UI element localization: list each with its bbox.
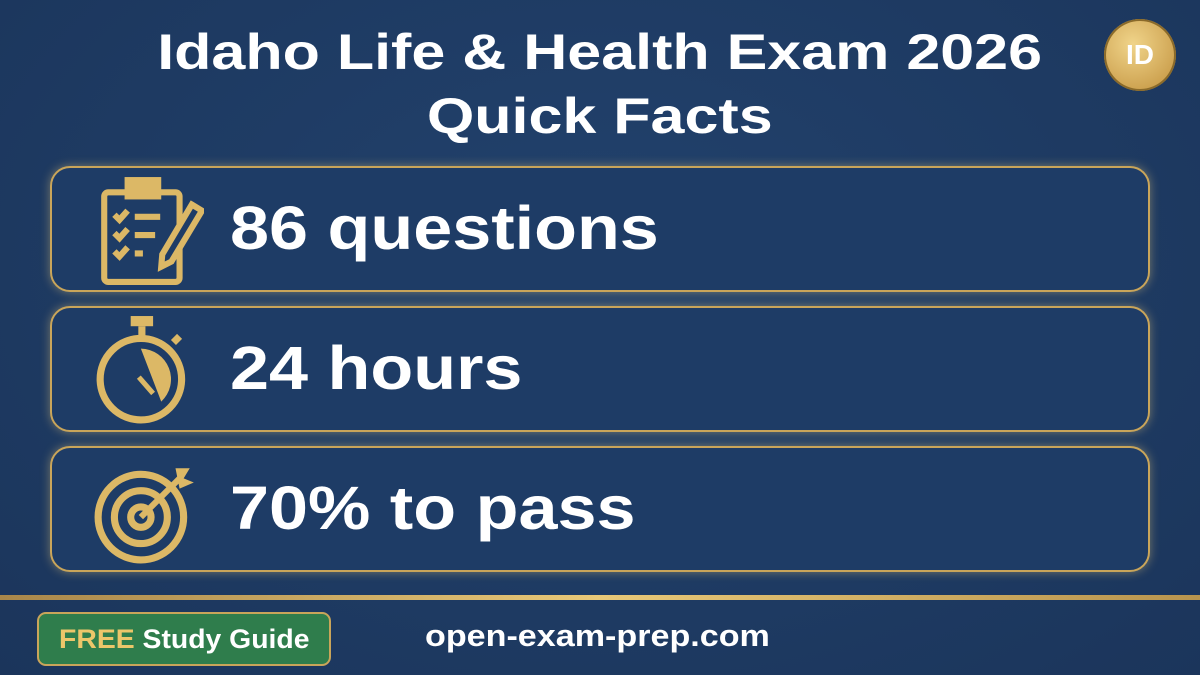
icon: stopwatch bbox=[96, 316, 186, 424]
panel: pass: 70% to pass bbox=[230, 474, 636, 542]
title bbox=[158, 24, 1042, 144]
panel: pass bbox=[50, 446, 1150, 572]
icon: target bbox=[94, 468, 194, 564]
panel: hours: 24 hours bbox=[230, 334, 522, 402]
badge: ID bbox=[1104, 19, 1176, 91]
button: free study guide bbox=[37, 612, 331, 666]
panel: questions bbox=[50, 166, 1150, 292]
button: free study guide: FREE Study Guide bbox=[59, 624, 309, 654]
title: Quick Facts bbox=[427, 88, 773, 144]
panel: questions: 86 questions bbox=[230, 194, 659, 262]
title: Idaho Life & Health Exam 2026 bbox=[158, 24, 1042, 80]
url: open-exam-prep.com bbox=[425, 618, 770, 653]
gold divider bbox=[0, 595, 1200, 600]
icon: clipboard bbox=[101, 177, 204, 285]
badge: ID: ID bbox=[1126, 39, 1154, 70]
panel: hours bbox=[50, 306, 1150, 432]
